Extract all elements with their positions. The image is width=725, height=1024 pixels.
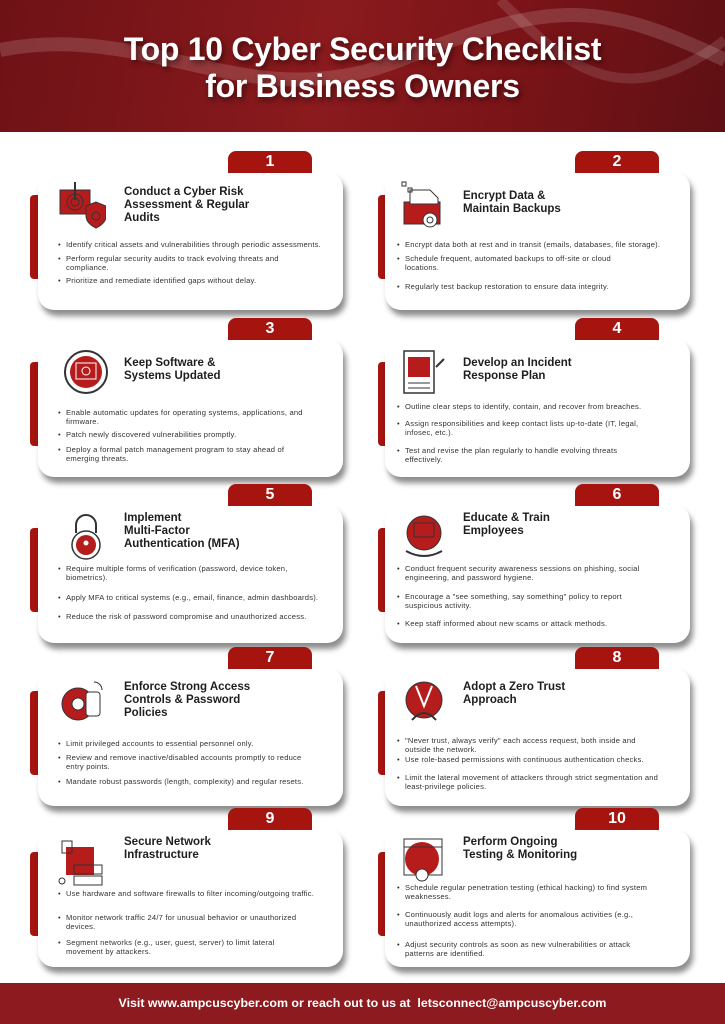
panel: card 10 bbox=[378, 808, 697, 977]
panel: card 4 bbox=[378, 318, 697, 487]
panel: card 9: Use hardware and software firewalls to filter incoming/outgoing traffic. bbox=[66, 889, 314, 898]
panel: card 6: Educate & Train bbox=[463, 512, 550, 524]
panel: card 1: Conduct a Cyber Risk bbox=[124, 186, 244, 198]
panel: card 5: Authentication (MFA) bbox=[124, 538, 240, 550]
panel: card 7: Mandate robust passwords (length, complexity) and regular resets. bbox=[66, 777, 304, 786]
panel: card 1: 1 bbox=[266, 153, 274, 170]
panel: card 1: Assessment & Regular bbox=[124, 199, 249, 211]
panel: card 4: Outline clear steps to identify, contain, and recover from breaches. bbox=[405, 402, 641, 411]
panel: card 9: 9 bbox=[266, 810, 274, 827]
panel: card 10: Schedule regular penetration testing (ethical hacking) to find system weaknesses. bbox=[405, 883, 647, 901]
panel: card 5: Require multiple forms of verification (password, device token, biometrics). bbox=[66, 564, 288, 582]
panel: card 7: Enforce Strong Access bbox=[124, 681, 250, 693]
icon: zero trust person bbox=[406, 682, 442, 721]
panel: card 6 bbox=[378, 484, 697, 653]
panel: card 8: "Never trust, always verify" each access request, both inside and outside the network. bbox=[405, 736, 636, 754]
panel: card 2: Maintain Backups bbox=[463, 203, 561, 215]
panel: card 5: Apply MFA to critical systems (e.g., email, finance, admin dashboards). bbox=[66, 593, 318, 602]
panel: card 8 bbox=[378, 647, 697, 816]
panel: card 7: 7 bbox=[266, 649, 274, 666]
panel: card 10: Testing & Monitoring bbox=[463, 849, 577, 861]
panel: card 9: Segment networks (e.g., user, guest, server) to limit lateral movement by attackers. bbox=[66, 938, 274, 956]
panel: card 5: Implement bbox=[124, 512, 182, 524]
panel: card 8: Adopt a Zero Trust bbox=[463, 681, 565, 693]
panel: card 2: Regularly test backup restoration to ensure data integrity. bbox=[405, 282, 609, 291]
panel: card 3: 3 bbox=[266, 320, 274, 337]
panel: card 6: 6 bbox=[613, 486, 621, 503]
panel: card 3: Patch newly discovered vulnerabilities promptly. bbox=[66, 430, 236, 439]
panel: card 3: Systems Updated bbox=[124, 370, 221, 382]
panel: card 7: Limit privileged accounts to essential personnel only. bbox=[66, 739, 254, 748]
footer bbox=[0, 983, 725, 1024]
panel: card 6: Employees bbox=[463, 525, 524, 537]
panel: card 1 bbox=[30, 151, 350, 320]
panel: card 2 bbox=[378, 151, 697, 320]
panel: card 1: Audits bbox=[124, 212, 160, 224]
panel: card 5 bbox=[30, 484, 350, 653]
icon: update gear bbox=[64, 350, 108, 394]
icon: training bbox=[406, 516, 442, 557]
icon: risk target bbox=[60, 182, 106, 228]
title: Top 10 Cyber Security Checklist bbox=[124, 31, 601, 67]
header banner bbox=[0, 0, 725, 132]
panel: card 9 bbox=[30, 808, 350, 977]
panel: card 4: Assign responsibilities and keep contact lists up-to-date (IT, legal, infosec, etc.). bbox=[405, 419, 638, 437]
panel: card 4: Develop an Incident bbox=[463, 357, 572, 369]
icon: padlock bbox=[71, 514, 101, 560]
panel: card 4: Test and revise the plan regularly to handle evolving threats effectively. bbox=[405, 446, 617, 464]
panel: card 5: Reduce the risk of password compromise and unauthorized access. bbox=[66, 612, 307, 621]
title: for Business Owners bbox=[205, 68, 520, 104]
panel: card 3 bbox=[30, 318, 350, 487]
panel: card 3: Enable automatic updates for operating systems, applications, and firmware. bbox=[66, 408, 303, 426]
icon: clipboard plan bbox=[403, 350, 445, 394]
panel: card 6: Encourage a "see something, say something" policy to report suspicious activity. bbox=[405, 592, 622, 610]
panel: card 9: Secure Network bbox=[124, 836, 211, 848]
panel: card 6: Keep staff informed about new scams or attack methods. bbox=[405, 619, 607, 628]
panel: card 8: Approach bbox=[463, 694, 517, 706]
panel: card 1: Perform regular security audits to track evolving threats and compliance. bbox=[66, 254, 279, 272]
panel: card 2: Schedule frequent, automated backups to off-site or cloud locations. bbox=[405, 254, 611, 272]
panel: card 4: 4 bbox=[613, 320, 621, 337]
icon: encrypted folder bbox=[402, 182, 440, 228]
title bbox=[124, 31, 604, 104]
icon: access gear bbox=[62, 682, 102, 720]
panel: card 5: 5 bbox=[266, 486, 274, 503]
panel: card 7 bbox=[30, 647, 350, 816]
panel: card 1: Identify critical assets and vulnerabilities through periodic assessments. bbox=[66, 240, 321, 249]
panel: card 9: Infrastructure bbox=[124, 849, 199, 861]
panel: card 8: Limit the lateral movement of attackers through strict segmentation and least-privilege policies. bbox=[405, 773, 658, 791]
panel: card 2: Encrypt data both at rest and in transit (emails, databases, file storage). bbox=[405, 240, 660, 249]
panel: card 1: Prioritize and remediate identified gaps without delay. bbox=[66, 276, 256, 285]
panel: card 7: Review and remove inactive/disabled accounts promptly to reduce entry points. bbox=[66, 753, 301, 771]
panel: card 3: Keep Software & bbox=[124, 357, 215, 369]
panel: card 10: 10 bbox=[608, 810, 626, 827]
panel: card 3: Deploy a formal patch management program to stay ahead of emerging threats. bbox=[66, 445, 284, 463]
icon: network server bbox=[58, 840, 102, 886]
panel: card 2: 2 bbox=[613, 153, 621, 170]
panel: card 10: Perform Ongoing bbox=[463, 836, 558, 848]
panel: card 9: Monitor network traffic 24/7 for unusual behavior or unauthorized devices. bbox=[66, 913, 296, 931]
panel: card 10: Continuously audit logs and alerts for anomalous activities (e.g., unauthorized access attempts). bbox=[405, 910, 633, 928]
panel: card 2: Encrypt Data & bbox=[463, 190, 545, 202]
panel: card 7: Controls & Password bbox=[124, 694, 240, 706]
icon: monitoring bbox=[404, 838, 442, 882]
panel: card 10: Adjust security controls as soon as new vulnerabilities or attack patterns are identified. bbox=[405, 940, 630, 958]
panel: card 5: Multi-Factor bbox=[124, 525, 190, 537]
panel: card 6: Conduct frequent security awareness sessions on phishing, social engineering, and password hygiene. bbox=[405, 564, 639, 582]
panel: card 7: Policies bbox=[124, 707, 167, 719]
panel: card 8: Use role-based permissions with continuous authentication checks. bbox=[405, 755, 644, 764]
panel: card 4: Response Plan bbox=[463, 370, 545, 382]
panel: card 8: 8 bbox=[613, 649, 621, 666]
footer: Visit www.ampcuscyber.com or reach out to us at letsconnect@ampcuscyber.com bbox=[119, 996, 606, 1010]
